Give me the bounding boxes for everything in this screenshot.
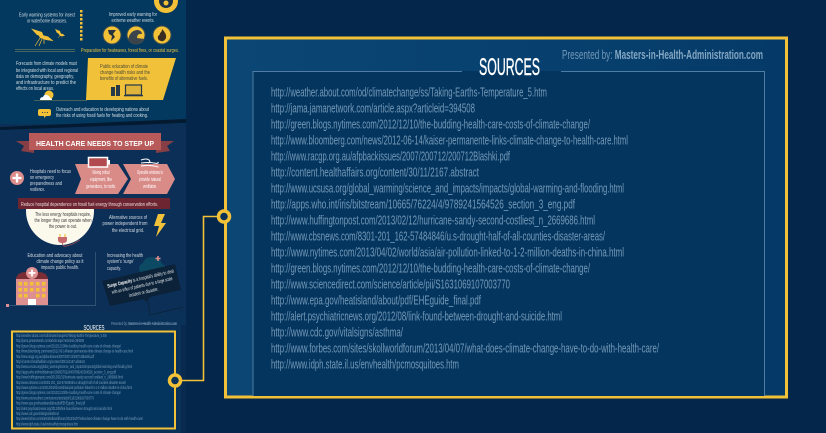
text: early warning insects [19,12,75,24]
icon: lightning [154,214,166,237]
reduce dependence bar [18,198,170,209]
text: hospitals: on emergency [30,175,54,181]
text: forecasts: data on demography, geography, [16,74,74,80]
icon: right connector node [218,211,230,222]
reduce dependence bar: Reduce hospital dependence on fossil fuel energy through conservation efforts. [21,202,158,208]
source list: http://alert.psychiatricnews.org/2012/08/link-found-between-drought-and-suicide.html [271,308,562,324]
text: hospitals: resilience. [30,187,45,193]
panel: public education [86,58,176,100]
panel: mini sources: http://www.nytimes.com/2013/04/02/world/asia/air-pollution-linked-to-1-2-million-deaths-in-china.html [16,385,132,390]
text: alternative sources: Alternative sources of [109,215,147,221]
text: surge capacity intro: capacity. [107,266,121,272]
arrow: moving equipment: Moving critical [92,170,110,176]
panel: public education: benefits of alternative fuels. [100,76,148,82]
heading: sources: SOURCES [479,54,540,81]
panel: mini sources: http://green.blogs.nytimes.com/2012/12/10/the-budding-health-care-costs-of-climate-change/ [16,343,122,348]
text: extreme weather [109,12,157,24]
icon: top badge [154,0,178,13]
panel: mini sources: http://apps.who.int/iris/bitstream/10665/76224/4/9789241564526_section_3_eng.pdf [16,369,117,374]
source list: http://www.racgp.org.au/afpbackissues/2007/200712/200712Blashki.pdf [271,148,510,164]
text: education and advocacy [28,253,84,271]
icon: left connector node [170,375,180,386]
text: preparation: Preparation for heatwaves, forest fires, or coastal surges. [81,48,179,54]
panel: mini sources: http://www.huffingtonpost.com/2013/02/12/hurricane-sandy-second-costliest_n_2669686.html [16,375,123,380]
source list: http://www.epa.gov/heatisland/about/pdf/EHEguide_final.pdf [271,292,481,308]
text: early warning insects: or waterborne diseases. [27,18,67,24]
icons: weather events [103,26,171,44]
panel: mini sources: http://weather.about.com/od/climatechange/ss/Taking-Earths-Temperature_5.htm [16,333,107,338]
icon: speech bubble [38,109,51,118]
source list: http://green.blogs.nytimes.com/2012/12/10/the-budding-health-care-costs-of-climate-change/ [271,260,590,276]
heading banner [16,133,174,153]
arrow: moving equipment: equipment, like [90,177,112,183]
panel: mini sources: http://jama.jamanetwork.com/article.aspx?articleid=394508 [16,338,84,343]
panel: sources [226,38,786,397]
arrow: operable windows: Operable windows to [137,170,163,176]
mini presented by: Presented by: Masters-in-Health-Administration.com [111,321,177,326]
text: hospitals [30,169,71,193]
text: forecasts: Forecasts from climate models must [16,61,77,67]
dotted divider [80,10,82,40]
left infographic strip [0,0,186,433]
circle: low energy hospitals: the longer they can operate when [34,218,92,224]
text: hospitals: Hospitals need to focus [30,169,71,175]
icon: books and laptop [111,85,143,96]
panel: mini sources: http://alert.psychiatricnews.org/2012/08/link-found-between-drought-and-suicide.html [16,406,112,411]
text: alternative sources: the electrical grid. [112,228,144,234]
panel: mini sources: http://www.cbsnews.com/8301-201_162-57484846/u.s-drought-half-of-all-counties-disaster-areas/ [16,380,127,385]
arrow: operable windows: ventilation. [143,184,157,190]
icon: sun and cloud [40,90,54,100]
source list [271,84,659,372]
source list: http://content.healthaffairs.org/content/30/11/2167.abstract [271,164,479,180]
callout: surge capacity: incident or disaster. [129,286,159,299]
text: early warning insects: Early warning systems for insect [19,12,75,18]
heading banner: HEALTH CARE NEEDS TO STEP UP [36,139,154,148]
callout: surge capacity: with an influx of patients due to a large scale [111,276,173,296]
text: forecasts: and infrastructure to predict the [16,80,76,86]
arrow: operable windows: provide natural [139,177,161,183]
source list: http://green.blogs.nytimes.com/2012/12/10/the-budding-health-care-costs-of-climate-change/ [271,116,590,132]
arrow: operable windows [123,164,175,194]
source list: http://weather.about.com/od/climatechange/ss/Taking-Earths-Temperature_5.htm [271,84,547,100]
arrow: moving equipment: generators, to roofs. [86,184,116,190]
panel: mini sources: http://www.epa.gov/heatisland/about/pdf/EHEguide_final.pdf [16,401,86,406]
icon: mosquitoes [31,28,65,46]
text: outreach [56,107,149,119]
text: forecasts: effects on local areas. [16,86,54,92]
arrow: moving equipment [75,164,128,194]
panel: mini sources: http://www.forbes.com/sites/skollworldforum/2013/04/07/what-does-climate-change-have-to-do-with-health-care/ [16,416,144,421]
text: alternative sources: power independent from [102,221,148,227]
circle: low energy hospitals: The less energy hospitals require, [35,212,91,218]
callout: surge capacity [102,264,183,315]
source list: http://www.cbsnews.com/8301-201_162-57484846/u.s-drought-half-of-all-counties-disaster-areas/ [271,228,605,244]
text: surge capacity intro: system's 'surge' [107,259,134,265]
text: surge capacity intro: Increasing the health [107,253,143,259]
circle: low energy hospitals [26,209,94,247]
divider with dot [6,252,96,307]
icon: hospital [16,267,48,305]
text: extreme weather: extreme weather events. [112,18,154,24]
icon: plug [58,234,80,246]
text: extreme weather: Improved early warning for [109,12,157,18]
text: forecasts: be integrated with local and regional [16,68,78,74]
panel: mini sources: http://content.healthaffairs.org/content/30/11/2167.abstract [16,359,86,364]
panel: mini sources: http://www.ucsusa.org/global_warming/science_and_impacts/impacts/global-warming-and-flooding.html [16,364,132,369]
panel: public education: change health risks and the [100,70,150,76]
source list: http://jama.jamanetwork.com/article.aspx?articleid=394508 [271,100,475,116]
icon: cloud with plus [139,256,167,272]
text: surge capacity intro [107,253,143,272]
text: education and advocacy: impacts public health. [41,265,79,271]
source list: http://www.idph.state.il.us/envhealth/pcmosquitoes.htm [271,356,459,372]
panel: mini sources: http://www.sciencedirect.com/science/article/pii/S1631069107003770 [16,395,94,400]
panel: mini sources: http://www.bloomberg.com/news/2012-06-14/kaiser-permanente-links-climate-change-to-health-care.html [16,349,133,354]
text: education and advocacy: Education and advocacy about [28,253,83,259]
text: alternative sources [102,215,148,234]
mini sources heading: SOURCES [84,325,105,332]
icon: plus [10,171,24,185]
panel: mini sources: http://green.blogs.nytimes.com/2012/12/10/the-budding-health-care-costs-of-climate-change/ [16,390,122,395]
callout: surge capacity: Surge Capacity is a hospital's ability to deal [107,269,174,290]
source list: http://apps.who.int/iris/bitstream/10665/76224/4/9789241564526_section_3_eng.pdf [271,196,575,212]
baseline [34,99,87,101]
connector arrow [170,216,224,386]
panel: mini sources [12,332,175,428]
section shadow [0,119,186,130]
text: outreach: Outreach and education to developing nations about [56,107,149,113]
divider lines [15,50,75,52]
source list: http://www.huffingtonpost.com/2013/02/12/hurricane-sandy-second-costliest_n_2669686.html [271,212,595,228]
panel: public education: Public education of climate [100,64,148,70]
text: outreach: the risks of using fossil fuels for heating and cooking. [56,113,148,119]
icon: battery [88,158,110,167]
text: hospitals: preparedness and [30,181,62,187]
panel: mini sources: http://www.cdc.gov/vitalsigns/asthma/ [16,411,60,416]
icon: wind [141,159,158,167]
text: forecasts [16,61,78,92]
panel: mini sources: http://www.racgp.org.au/afpbackissues/2007/200712/200712Blashki.pdf [16,354,94,359]
text: education and advocacy: climate change policy as it [36,259,84,265]
source list: http://www.cdc.gov/vitalsigns/asthma/ [271,324,403,340]
circle: low energy hospitals: the power is out. [49,224,77,230]
panel: mini sources: http://www.idph.state.il.us/envhealth/pcmosquitoes.htm [16,421,78,426]
source list: http://www.sciencedirect.com/science/article/pii/S1631069107003770 [271,276,510,292]
